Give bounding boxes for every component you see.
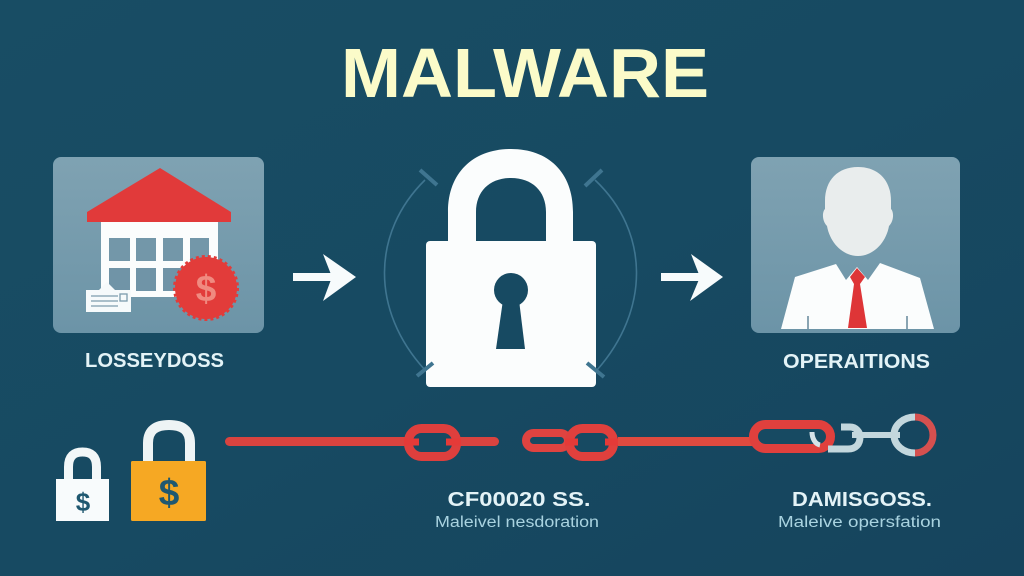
icon: large yellow lock bbox=[131, 425, 206, 521]
stat block: right: DAMISGOSS. bbox=[792, 489, 932, 511]
panel: operations bbox=[751, 157, 960, 333]
arrow: left to lock bbox=[293, 254, 356, 301]
icon: small white lock bbox=[56, 452, 109, 521]
stat block: center bbox=[435, 489, 599, 531]
icon: central padlock bbox=[384, 149, 637, 387]
label: operations: OPERAITIONS bbox=[783, 351, 930, 373]
arcs around lock bbox=[384, 170, 637, 377]
icon: shirt bbox=[781, 263, 934, 329]
icon: building bbox=[87, 168, 231, 297]
arrow: lock to operations bbox=[661, 254, 723, 301]
panel: bank losses bbox=[53, 157, 264, 333]
title: MALWARE bbox=[341, 34, 709, 112]
chain: right segment bbox=[526, 424, 830, 456]
icon: small white lock: $ bbox=[76, 487, 91, 517]
icon: document card bbox=[86, 282, 131, 312]
keyhole bbox=[494, 273, 528, 349]
stat block: center: Maleivel nesdoration bbox=[435, 514, 599, 531]
chain: broken grey link bbox=[812, 417, 933, 453]
icon: person head bbox=[823, 167, 893, 256]
icon: dollar badge: $ bbox=[196, 268, 217, 309]
stat block: right bbox=[778, 489, 941, 531]
chain: left segment bbox=[225, 428, 499, 456]
icon: red tie bbox=[848, 268, 867, 328]
icon: large yellow lock: $ bbox=[159, 472, 180, 513]
stat block: right: Maleive opersfation bbox=[778, 514, 941, 531]
stat block: center: CF00020 SS. bbox=[448, 489, 590, 511]
label: losses: LOSSEYDOSS bbox=[85, 350, 224, 372]
icon: dollar badge bbox=[174, 256, 238, 320]
